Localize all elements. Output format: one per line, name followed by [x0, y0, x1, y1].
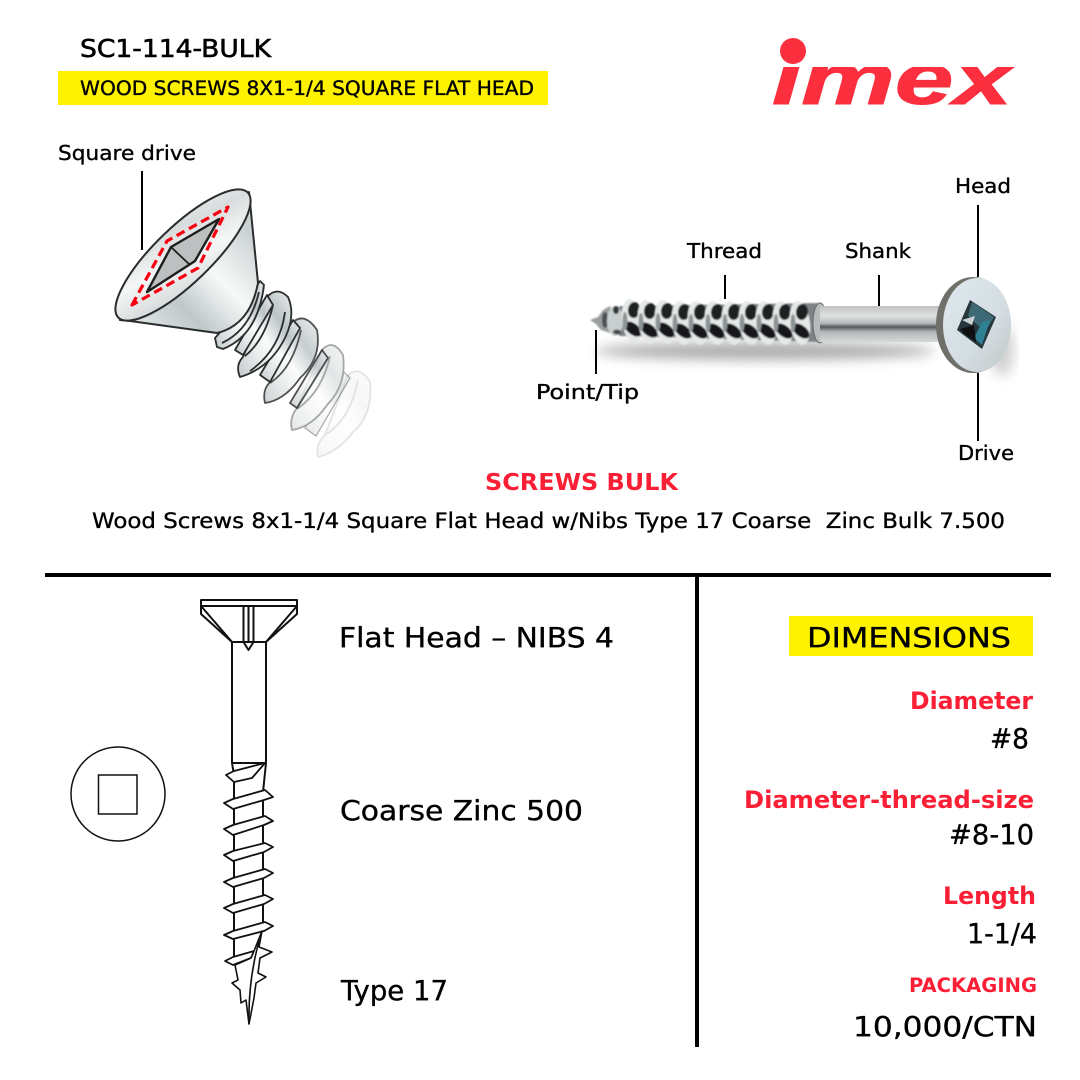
dimension: diameter — [910, 687, 1033, 755]
label: shank: Shank — [845, 239, 911, 263]
fading thread 5 — [317, 371, 370, 457]
icon: square drive top view — [71, 747, 165, 841]
illustration: angled flat head screw with fading threads — [99, 172, 370, 457]
dimension: diameter: #8 — [990, 722, 1029, 755]
label: point/tip — [536, 330, 639, 404]
label: shank — [845, 239, 911, 306]
cone of the head — [120, 192, 258, 333]
fading thread 4 — [291, 345, 350, 436]
label: square drive: Square drive — [58, 141, 196, 165]
imex logo: imex — [772, 40, 1016, 120]
yellow product title banner — [58, 71, 548, 105]
label: head — [955, 174, 1011, 277]
head face — [943, 278, 1011, 372]
spec: coarse zinc: Coarse Zinc 500 — [340, 794, 583, 827]
label: point/tip: Point/Tip — [536, 380, 639, 404]
soft shadow — [595, 342, 935, 360]
label: square drive — [58, 141, 196, 250]
line drawing: screw side profile — [201, 600, 297, 1024]
square drive recess — [957, 300, 996, 349]
label: thread: Thread — [686, 239, 762, 263]
dimensions heading: DIMENSIONS — [807, 621, 1011, 654]
thread crests — [607, 306, 623, 336]
dimension: length: 1-1/4 — [967, 917, 1037, 950]
dimension: packaging — [853, 974, 1037, 1043]
imex logo — [772, 38, 1015, 105]
dimension: diameter-thread-size: #8-10 — [949, 818, 1034, 851]
dimension: diameter: Diameter — [910, 687, 1033, 715]
dimension: length: Length — [943, 882, 1036, 910]
dimension: diameter-thread-size: Diameter-thread-size — [744, 786, 1034, 814]
label: drive — [958, 373, 1014, 465]
dimension: packaging: PACKAGING — [909, 974, 1037, 997]
section heading: screws bulk: SCREWS BULK — [485, 470, 679, 496]
dimensions heading — [789, 616, 1033, 656]
product description: Wood Screws 8x1-1/4 Square Flat Head w/Nibs Type 17 Coarse Zinc Bulk 7.500 — [92, 509, 1005, 534]
label: thread — [686, 239, 762, 299]
square recess — [147, 219, 219, 292]
head face — [99, 172, 267, 338]
product code heading: SC1-114-BULK — [80, 34, 272, 63]
dimension: length — [943, 882, 1037, 950]
spec: type: Type 17 — [340, 974, 448, 1007]
shank — [820, 306, 942, 342]
label: drive: Drive — [958, 441, 1014, 465]
label: head: Head — [955, 174, 1011, 198]
spec: flat head: Flat Head – NIBS 4 — [339, 621, 614, 654]
red dashed outline — [132, 207, 228, 305]
head rim — [936, 277, 1010, 373]
thread 2 — [238, 292, 300, 382]
thread blades — [224, 763, 273, 965]
illustration: photo of zinc screw — [590, 277, 1014, 376]
screw tip — [590, 306, 614, 333]
horizontal divider — [45, 573, 1051, 577]
vertical divider — [695, 575, 699, 1047]
thread 1 — [215, 281, 273, 355]
threaded body — [590, 298, 820, 346]
threaded core — [232, 763, 266, 961]
yellow product title banner: WOOD SCREWS 8X1-1/4 SQUARE FLAT HEAD — [80, 77, 534, 100]
screw shank — [232, 642, 266, 763]
dimension: packaging: 10,000/CTN — [853, 1010, 1037, 1043]
thread 3 — [264, 318, 328, 408]
pointed notched tip — [232, 931, 272, 1024]
screw head — [201, 600, 297, 650]
dimension: diameter-thread-size — [744, 786, 1034, 851]
